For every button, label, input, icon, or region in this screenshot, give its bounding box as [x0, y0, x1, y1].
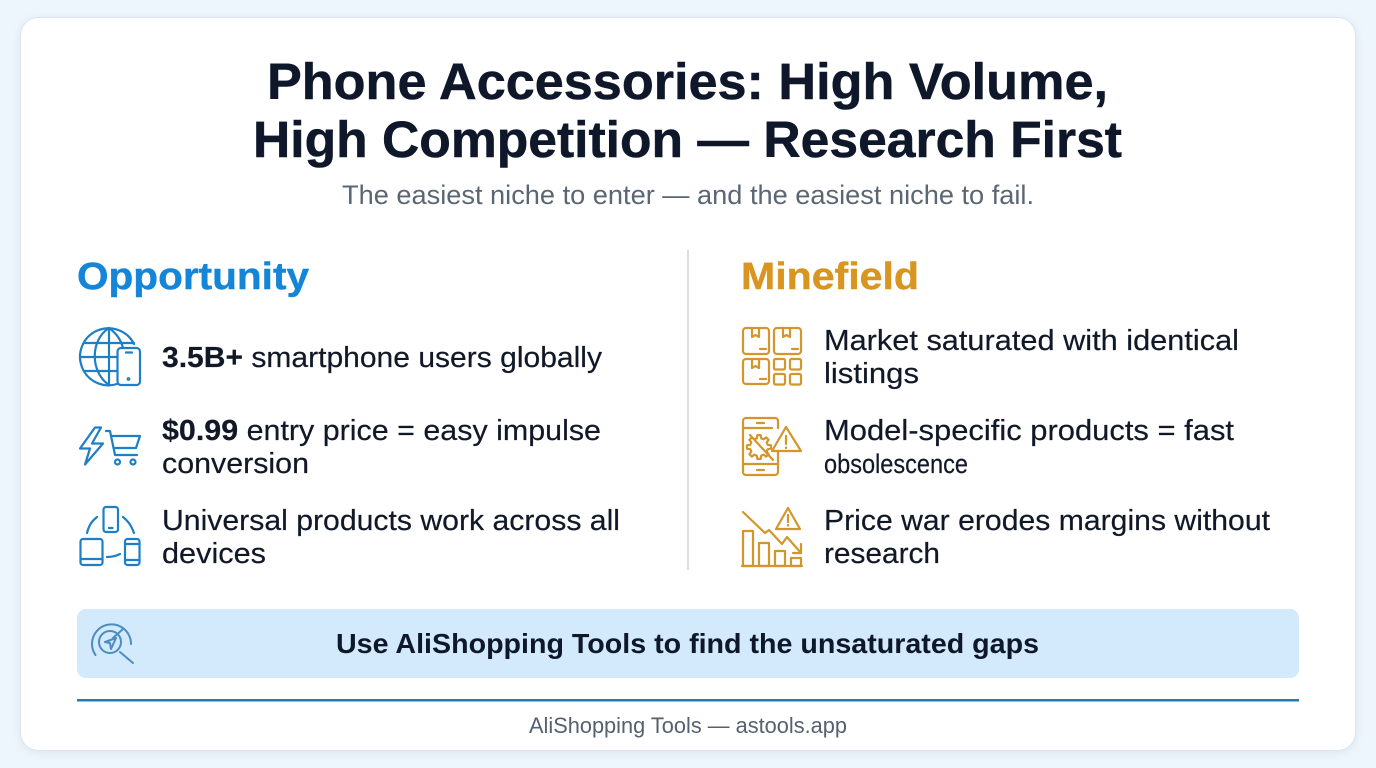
text: saturated market: Market saturated with identical [824, 325, 1239, 357]
callout text: Use AliShopping Tools to find the unsaturated gaps [336, 628, 1039, 659]
text: universal products: Universal products work across all [162, 505, 620, 537]
text: price war: research [824, 538, 940, 570]
text: price war [824, 505, 1270, 570]
text: saturated market [824, 325, 1239, 390]
icon: phone with gear and warning [743, 418, 801, 475]
title: High Competition — Research First [253, 111, 1122, 168]
text: universal products: devices [162, 538, 266, 570]
divider [687, 250, 689, 570]
text: model-specific [824, 415, 1234, 479]
footer text: AliShopping Tools — astools.app [529, 713, 847, 738]
icon: radar magnifier [92, 624, 133, 663]
callout bar [77, 609, 1299, 678]
text: universal products [162, 505, 620, 570]
subtitle: The easiest niche to enter — and the easiest niche to fail. [342, 180, 1034, 210]
text: entry price: $0.99 entry price = easy impulse [162, 415, 601, 447]
text: entry price: conversion [162, 448, 309, 480]
icon: boxes grid [743, 328, 801, 384]
icon: falling bars with warning [742, 508, 802, 566]
panel: opportunity [77, 256, 620, 570]
text: entry price [162, 415, 601, 480]
heading: Opportunity: Opportunity [77, 256, 309, 298]
title: Phone Accessories: High Volume, [267, 53, 1108, 110]
heading: Minefield: Minefield [741, 256, 919, 298]
text: smartphone users: 3.5B+ smartphone users globally [162, 342, 603, 374]
text: model-specific: Model-specific products = fast [824, 415, 1234, 447]
footer rule [77, 699, 1299, 702]
icon: globe and phone [80, 328, 140, 385]
icon: lightning and cart [80, 428, 140, 464]
title [253, 53, 1122, 168]
panel: minefield [741, 256, 1270, 570]
text: saturated market: listings [824, 358, 919, 390]
text: price war: Price war erodes margins without [824, 505, 1270, 537]
text: model-specific: obsolescence [824, 449, 968, 479]
icon: connected devices [80, 507, 140, 565]
